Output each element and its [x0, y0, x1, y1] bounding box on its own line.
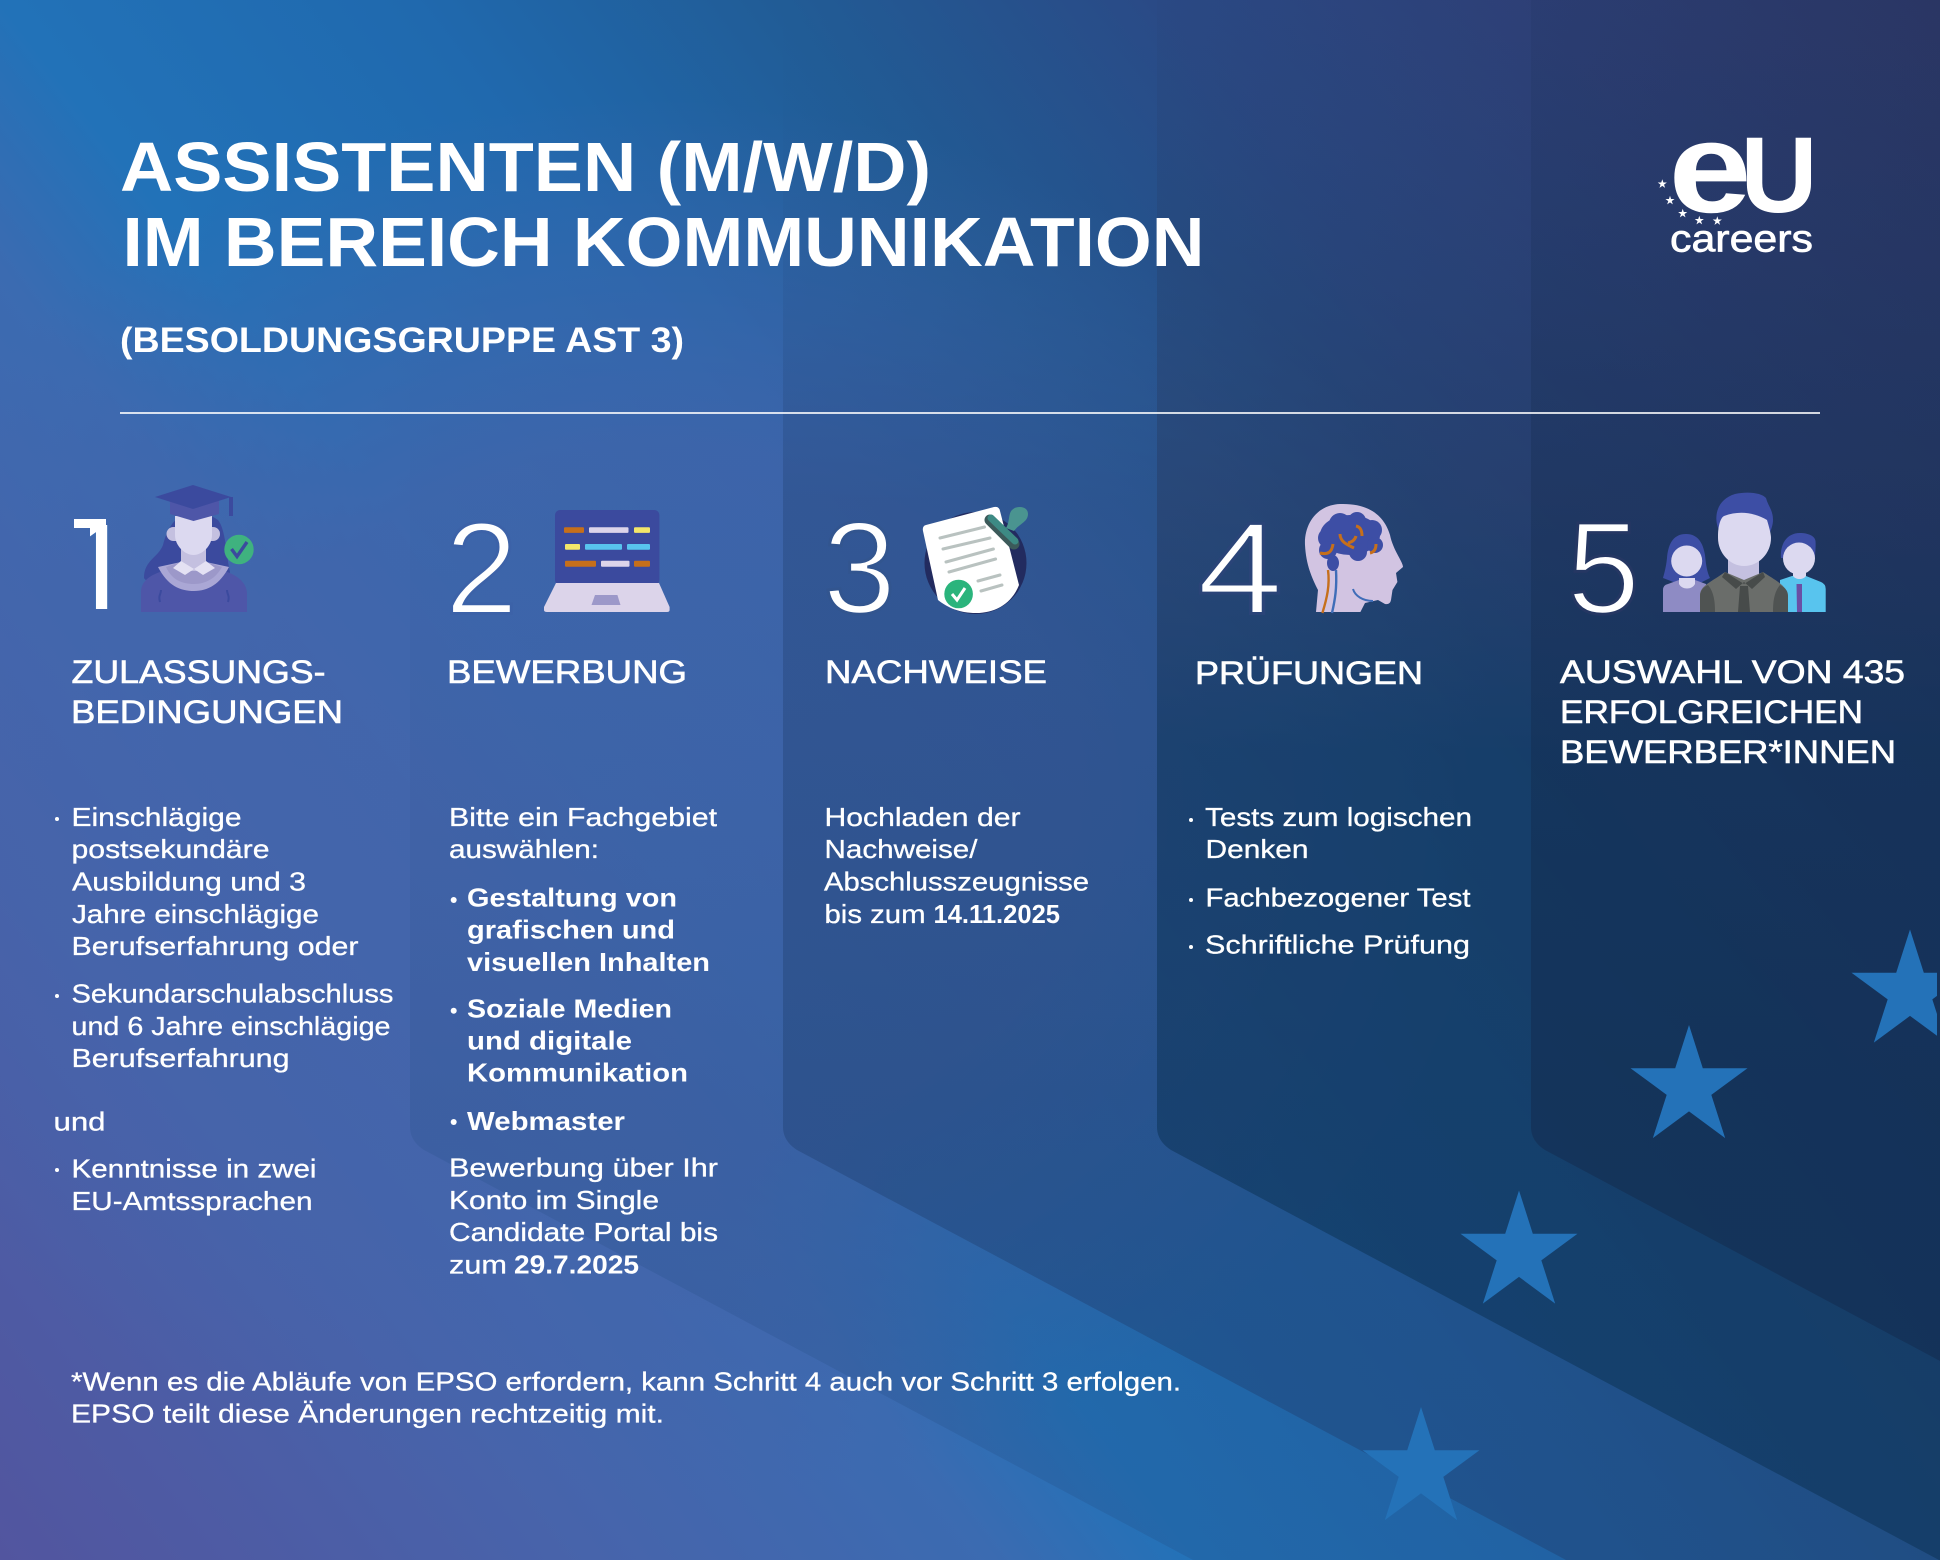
step number 5: 5 — [1567, 494, 1640, 641]
text block: application: und digitale — [467, 1026, 632, 1056]
heading: PRÜFUNGEN — [1195, 655, 1423, 691]
text block: application: Konto im Single — [449, 1185, 659, 1215]
text block: documents: 14.11.2025 — [934, 899, 1060, 929]
text block: exams — [1189, 802, 1472, 960]
text block: requirements: Sekundarschulabschluss — [72, 978, 394, 1008]
text block: exams: Fachbezogener Test — [1206, 883, 1471, 913]
text block: requirements — [54, 802, 394, 1216]
heading — [71, 654, 343, 730]
subtitle: (BESOLDUNGSGRUPPE AST 3) — [120, 321, 684, 360]
heading: BEWERBER*INNEN — [1560, 734, 1896, 770]
panel: step 5 Auswahl — [1560, 493, 1905, 770]
text block: requirements: Kenntnisse in zwei — [72, 1154, 316, 1184]
logo: EU careers — [1658, 96, 1818, 261]
logo: EU careers: U — [1740, 114, 1818, 235]
text block: application — [449, 802, 718, 1280]
panel: step 3 Nachweise — [823, 494, 1089, 929]
heading: AUSWAHL VON 435 — [1560, 654, 1905, 690]
text block: exams: Schriftliche Prüfung — [1205, 930, 1470, 960]
text block: requirements: postsekundäre — [72, 834, 270, 864]
footnote: EPSO teilt diese Änderungen rechtzeitig mit. — [71, 1399, 664, 1429]
heading: BEWERBUNG — [447, 654, 687, 690]
divider — [120, 412, 1820, 414]
title — [120, 128, 1204, 281]
icon: group of three people — [1663, 493, 1826, 612]
heading: BEDINGUNGEN — [71, 694, 343, 730]
text block: requirements: Jahre einschlägige — [72, 899, 319, 929]
heading: ZULASSUNGS- — [72, 654, 326, 690]
footnote: *Wenn es die Abläufe von EPSO erfordern, kann Schritt 4 auch vor Schritt 3 erfolgen. — [71, 1367, 1181, 1397]
heading — [1560, 654, 1905, 770]
title: ASSISTENTEN (M/W/D) — [120, 128, 931, 206]
text block: documents: bis zum — [824, 899, 926, 929]
text block: requirements: Ausbildung und 3 — [72, 866, 306, 896]
step number 1: 1 — [59, 490, 139, 652]
text block: exams: Denken — [1206, 834, 1308, 864]
background column bands — [410, 0, 1940, 1560]
panel: step 2 Bewerbung — [445, 494, 718, 1280]
icon: graduate with check mark — [141, 485, 254, 612]
text block: requirements: und — [54, 1106, 106, 1136]
icon: laptop — [544, 510, 670, 612]
heading: NACHWEISE — [825, 654, 1047, 690]
icon: head with brain — [1305, 504, 1403, 613]
text block: requirements: und 6 Jahre einschlägige — [72, 1011, 390, 1041]
footnote — [71, 1367, 1181, 1429]
text block: application: auswählen: — [449, 834, 599, 864]
text block: documents: Hochladen der — [824, 802, 1021, 832]
text block: application: Soziale Medien — [467, 994, 672, 1024]
text block: exams: Tests zum logischen — [1205, 802, 1472, 832]
icon: document with stamp — [923, 507, 1028, 614]
step number 1 — [74, 519, 108, 609]
text block: requirements: Berufserfahrung — [72, 1043, 290, 1073]
text block: application: Gestaltung von — [467, 883, 677, 913]
step number 3: 3 — [823, 494, 896, 641]
step number 4: 4 — [1197, 494, 1283, 642]
panel: step 4 Prüfungen — [1189, 494, 1472, 960]
title: IM BEREICH KOMMUNIKATION — [122, 203, 1204, 281]
text block: application: Bitte ein Fachgebiet — [449, 802, 718, 832]
text block: application: Webmaster — [467, 1106, 625, 1136]
text block: documents — [824, 802, 1089, 929]
panel: step 1 Zulassungsbedingungen — [54, 485, 394, 1216]
text block: application: visuellen Inhalten — [467, 947, 710, 977]
text block: application: zum — [449, 1250, 507, 1280]
logo: EU careers: e — [1668, 96, 1752, 240]
step number 2: 2 — [445, 494, 518, 642]
text block: application: Kommunikation — [467, 1058, 688, 1088]
decorative EU stars — [1363, 930, 1940, 1520]
text block: requirements: EU-Amtssprachen — [72, 1186, 312, 1216]
text block: documents: Abschlusszeugnisse — [824, 866, 1089, 896]
text block: documents: Nachweise/ — [824, 834, 978, 864]
text block: application: 29.7.2025 — [514, 1250, 639, 1280]
logo: EU careers: careers — [1670, 219, 1813, 261]
text block: application: grafischen und — [467, 914, 675, 944]
text block: requirements: Einschlägige — [72, 802, 242, 832]
text block: application: Bewerbung über Ihr — [449, 1153, 718, 1183]
heading: ERFOLGREICHEN — [1560, 694, 1863, 730]
text block: requirements: Berufserfahrung oder — [72, 931, 359, 961]
text block: application: Candidate Portal bis — [449, 1217, 718, 1247]
